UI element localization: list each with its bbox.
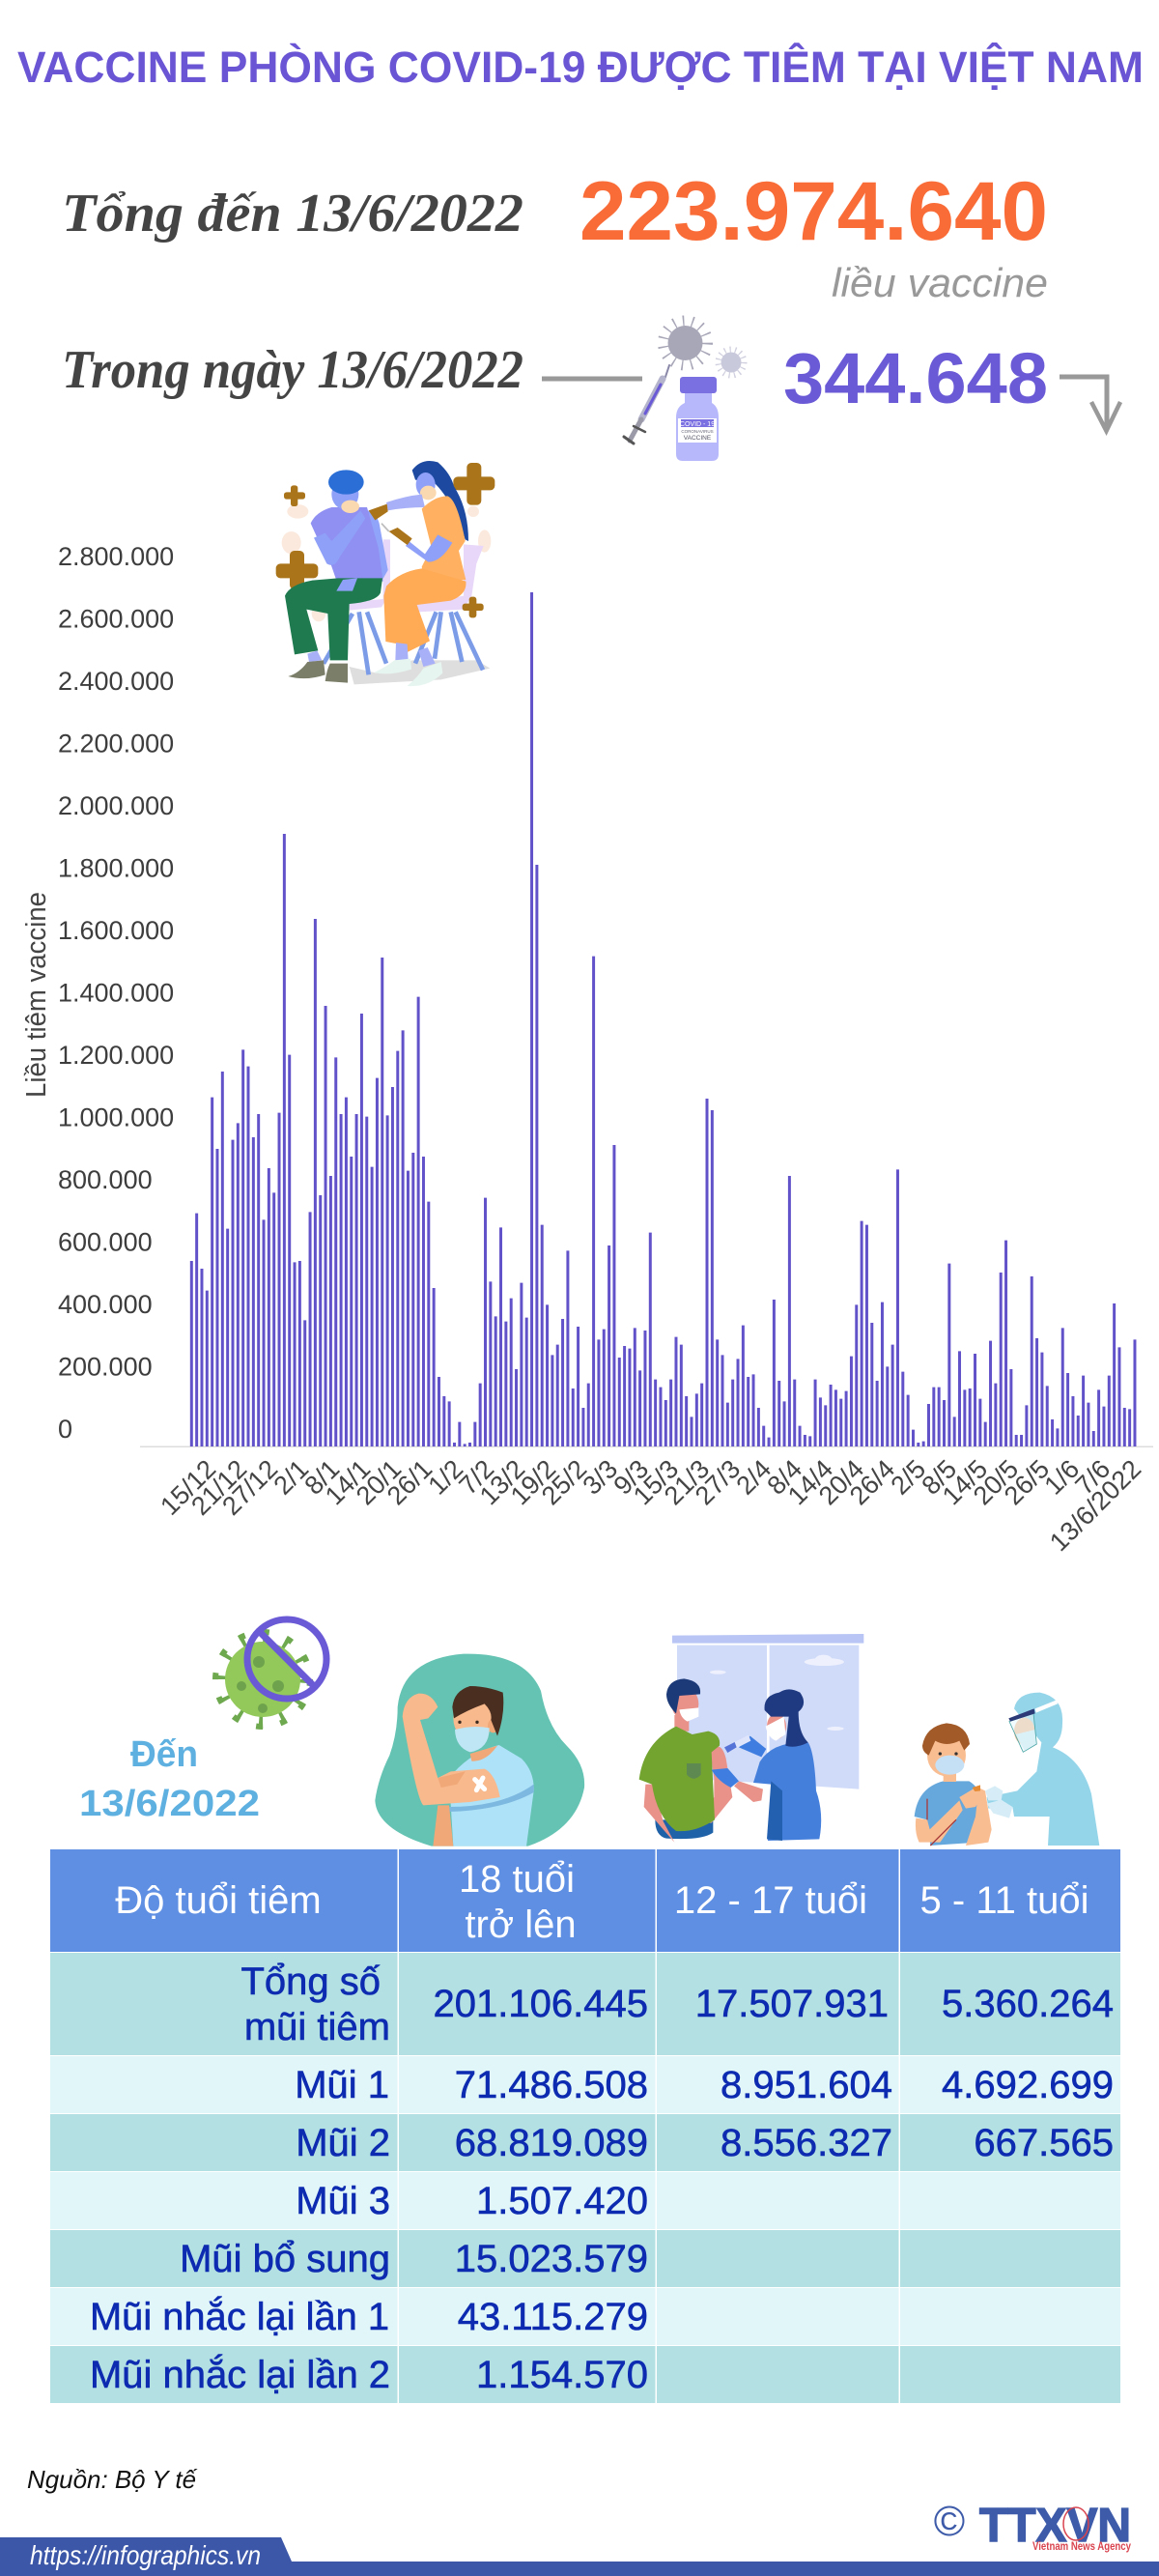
date label: Đến <box>130 1734 198 1775</box>
x axis labels: 2/1 <box>268 1454 314 1501</box>
row: dose 1: 8.951.604 <box>721 2064 892 2106</box>
row: additional dose <box>180 2238 648 2280</box>
x axis labels: 21/3 <box>659 1454 715 1510</box>
y axis labels: 400.000 <box>58 1290 153 1319</box>
x axis labels: 7/6 <box>1069 1454 1116 1501</box>
row: total doses: 201.106.445 <box>434 1983 648 2025</box>
daily label: Trong ngày 13/6/2022 <box>62 340 523 400</box>
row: booster 1: Mũi nhắc lại lần 1 <box>90 2295 389 2338</box>
table header: 5 - 11 tuổi <box>920 1879 1088 1922</box>
y axis labels: 800.000 <box>58 1165 153 1194</box>
x axis labels: 13/2 <box>474 1454 530 1510</box>
row: total doses: 5.360.264 <box>942 1983 1114 2025</box>
x axis labels: 8/5 <box>916 1454 962 1501</box>
row: dose 1: 4.692.699 <box>942 2064 1114 2106</box>
row: additional dose: 15.023.579 <box>455 2238 648 2280</box>
date label: 13/6/2022 <box>79 1784 260 1824</box>
row: booster 1: 43.115.279 <box>458 2296 648 2338</box>
x axis labels: 14/4 <box>782 1454 838 1510</box>
y axis labels: 2.400.000 <box>58 667 174 696</box>
icon: vial: VACCINE <box>684 435 712 442</box>
illustration: nurse vaccinating adolescent by window <box>639 1634 863 1843</box>
x axis labels: 27/3 <box>690 1454 746 1510</box>
y axis labels: 2.800.000 <box>58 542 174 571</box>
x axis labels: 26/1 <box>382 1454 438 1510</box>
icon: vaccine vial, syringe and viruses <box>624 321 744 461</box>
footer bar: https://infographics.vn <box>30 2540 261 2570</box>
x axis labels: 14/1 <box>320 1454 376 1510</box>
y axis title: Liều tiêm vaccine <box>21 892 52 1098</box>
y axis labels: 1.600.000 <box>58 916 174 945</box>
logo: TTXVN: TTXVN <box>979 2500 1131 2552</box>
title: VACCINE PHÒNG COVID-19 ĐƯỢC TIÊM TẠI VIỆT NAM <box>17 43 1144 92</box>
x axis labels: 7/2 <box>453 1454 499 1501</box>
x axis labels: 15/12 <box>155 1454 221 1521</box>
logo: TTXVN: Vietnam News Agency <box>1032 2539 1131 2553</box>
date label <box>79 1734 260 1824</box>
row: additional dose: Mũi bổ sung <box>180 2238 390 2280</box>
x axis labels: 2/5 <box>885 1454 931 1501</box>
total doses block <box>62 165 1048 305</box>
unit label: liều vaccine <box>832 260 1048 305</box>
x axis labels: 14/5 <box>937 1454 993 1510</box>
daily number: 344.648 <box>783 338 1048 418</box>
row: dose 1 <box>295 2064 1114 2106</box>
y axis labels: 2.600.000 <box>58 605 174 634</box>
logo: TTXVN: © <box>934 2498 965 2545</box>
table backgrounds <box>50 1849 1120 2403</box>
x axis labels: 19/2 <box>505 1454 561 1510</box>
x axis labels: 20/4 <box>813 1454 869 1510</box>
x axis labels: 8/1 <box>298 1454 345 1501</box>
x axis labels <box>155 1454 1146 1557</box>
icon: down arrow <box>1060 377 1120 431</box>
row: dose 2 <box>296 2122 1114 2164</box>
x axis labels: 2/4 <box>730 1454 777 1501</box>
row: dose 1: 71.486.508 <box>455 2064 648 2106</box>
x axis labels: 21/12 <box>185 1454 252 1521</box>
row: dose 2: 8.556.327 <box>721 2122 892 2164</box>
y axis labels: 1.400.000 <box>58 978 174 1007</box>
row: dose 3 <box>296 2180 648 2222</box>
y axis labels: 2.200.000 <box>58 729 174 758</box>
y axis labels: 1.200.000 <box>58 1041 174 1070</box>
row: dose 3: Mũi 3 <box>296 2180 390 2222</box>
icon: vial: COVID - 19 <box>680 421 715 428</box>
x axis labels: 26/5 <box>999 1454 1055 1510</box>
row: total doses <box>240 1961 1114 2048</box>
icon: vial <box>676 377 719 461</box>
row: total doses: Tổng số <box>240 1961 381 2003</box>
connector line <box>542 377 642 381</box>
row: booster 2: 1.154.570 <box>476 2354 648 2396</box>
icon: vial: CORONAVIRUS <box>681 429 714 434</box>
icon: syringe <box>624 365 669 444</box>
y axis labels: 1.800.000 <box>58 854 174 883</box>
x axis labels: 9/3 <box>608 1454 654 1501</box>
icon: crossed-out virus <box>215 1619 326 1727</box>
row: booster 1 <box>90 2295 648 2338</box>
row: dose 2: 68.819.089 <box>455 2122 648 2164</box>
row: total doses: 17.507.931 <box>695 1983 889 2025</box>
x axis labels: 1/2 <box>422 1454 468 1501</box>
y axis labels: 200.000 <box>58 1353 153 1382</box>
row: booster 2: Mũi nhắc lại lần 2 <box>90 2353 390 2396</box>
x axis labels: 13/6/2022 <box>1044 1454 1146 1557</box>
table header: 18 tuổi <box>459 1858 575 1901</box>
x axis labels: 20/5 <box>968 1454 1024 1510</box>
bar chart: daily vaccine doses <box>21 542 1153 1557</box>
table header: 12 - 17 tuổi <box>674 1879 867 1922</box>
x axis labels: 3/3 <box>577 1454 623 1501</box>
x axis labels: 1/6 <box>1038 1454 1085 1501</box>
row: booster 2 <box>90 2353 648 2396</box>
total number: 223.974.640 <box>580 165 1048 258</box>
y axis labels: 1.000.000 <box>58 1103 174 1132</box>
y axis labels: 2.000.000 <box>58 791 174 820</box>
x axis labels: 26/4 <box>844 1454 900 1510</box>
x axis labels: 8/4 <box>761 1454 807 1501</box>
daily doses block <box>62 338 1120 431</box>
footer bar <box>0 2537 1159 2576</box>
table header: Độ tuổi tiêm <box>115 1879 322 1922</box>
table header: trở lên <box>465 1903 577 1946</box>
x axis labels: 25/2 <box>536 1454 592 1510</box>
x axis labels: 27/12 <box>216 1454 283 1521</box>
illustration: nurse vaccinating a seated man <box>276 461 495 686</box>
illustration: man showing vaccinated arm <box>375 1654 584 1846</box>
x axis labels: 20/1 <box>351 1454 407 1510</box>
table header <box>115 1858 1088 1946</box>
y axis labels: 0 <box>58 1415 72 1444</box>
bars <box>191 592 1135 1446</box>
y axis labels: 600.000 <box>58 1227 153 1256</box>
row: dose 2: 667.565 <box>974 2122 1114 2164</box>
x axis labels: 15/3 <box>628 1454 684 1510</box>
icon: large grey virus <box>663 321 707 365</box>
total label: Tổng đến 13/6/2022 <box>62 184 523 243</box>
source note: Nguồn: Bộ Y tế <box>27 2465 198 2494</box>
illustration: nurse in protective suit vaccinating child <box>915 1693 1099 1846</box>
row: total doses: mũi tiêm <box>244 2006 390 2048</box>
icon: small grey virus <box>719 350 744 375</box>
y axis labels <box>58 542 174 1444</box>
row: dose 2: Mũi 2 <box>296 2122 390 2164</box>
row: dose 3: 1.507.420 <box>476 2180 648 2222</box>
row: dose 1: Mũi 1 <box>295 2064 389 2106</box>
table: doses by age group <box>50 1849 1120 2403</box>
